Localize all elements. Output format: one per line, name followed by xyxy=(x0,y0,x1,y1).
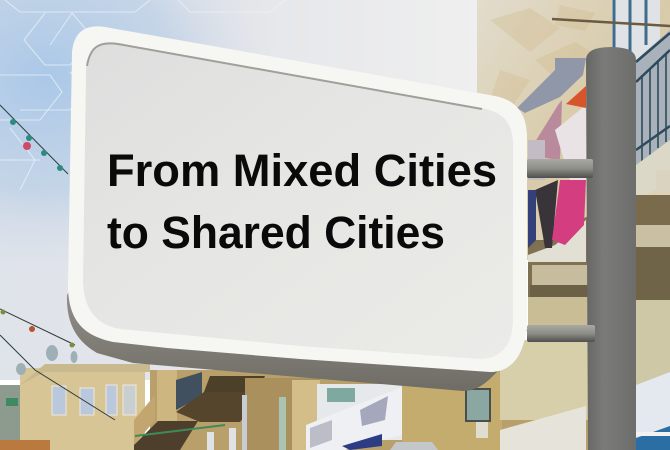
sign side depth xyxy=(67,290,527,391)
hanging laundry xyxy=(517,58,586,248)
clothes line xyxy=(552,19,670,26)
title line 2: to Shared Cities xyxy=(107,207,445,258)
stairs and landing xyxy=(528,140,670,347)
sign inner shadow xyxy=(87,43,482,109)
street sign xyxy=(67,26,527,391)
wall lamp xyxy=(466,389,490,438)
background: stone wall upper right xyxy=(477,0,670,260)
title line 1: From Mixed Cities xyxy=(107,145,497,196)
pole xyxy=(586,47,636,450)
lower wall right xyxy=(150,300,670,450)
stone building lower middle xyxy=(207,378,320,450)
sign title xyxy=(107,145,497,258)
upper support arm xyxy=(527,159,593,178)
background: sky xyxy=(0,0,478,380)
background: hexagon pattern xyxy=(0,0,285,190)
sign white frame xyxy=(68,26,527,372)
string lights xyxy=(0,105,225,436)
balcony with blue railing xyxy=(612,0,670,168)
satellite dishes xyxy=(16,345,78,375)
sign post xyxy=(527,47,636,450)
lower support arm xyxy=(527,325,595,342)
sign face xyxy=(83,42,513,359)
balconies lower middle xyxy=(134,370,265,450)
lower left building xyxy=(0,364,150,450)
shop signs xyxy=(306,384,438,450)
